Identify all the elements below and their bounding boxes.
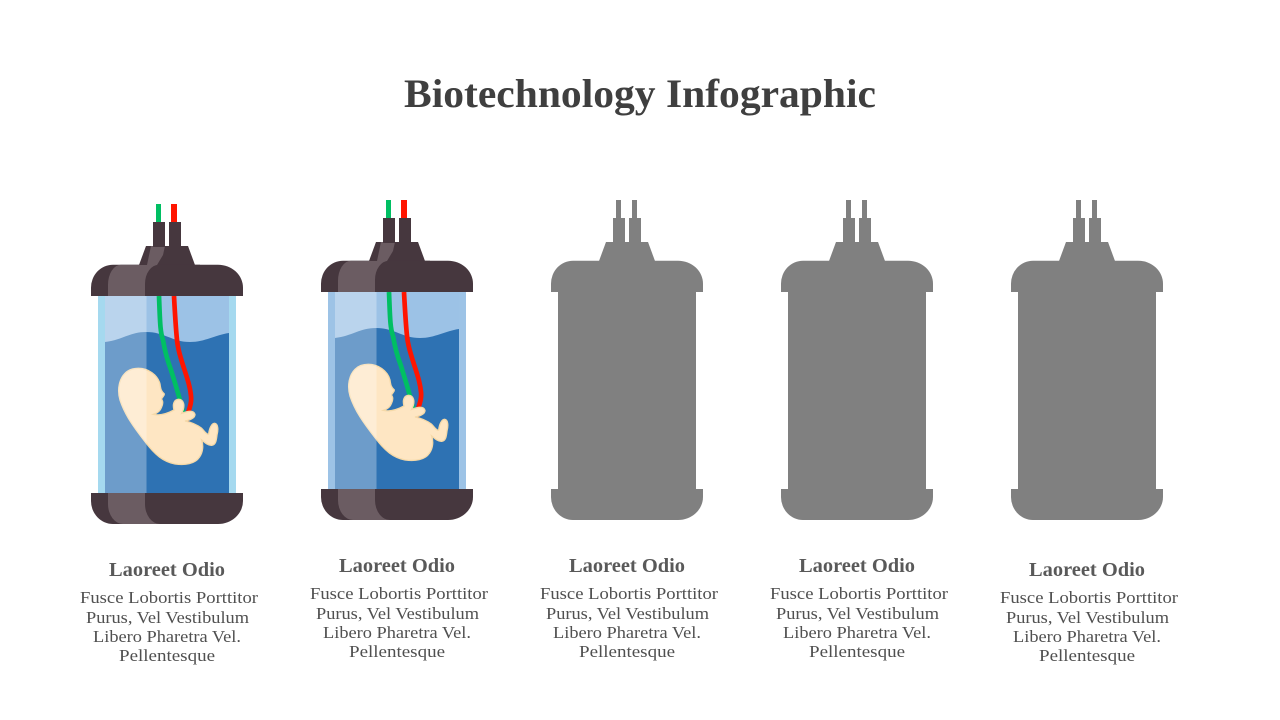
title: Biotechnology Infographic <box>404 71 876 116</box>
text block: column 4: Pellentesque <box>809 642 905 661</box>
text block: column 1: Fusce Lobortis Porttitor <box>80 588 258 607</box>
text block: column 2: Libero Pharetra Vel. <box>323 623 471 642</box>
text block: column 4: Libero Pharetra Vel. <box>783 623 931 642</box>
text block: column 4: Fusce Lobortis Porttitor <box>770 584 948 603</box>
panel: column 1 <box>80 204 258 665</box>
icon: gray bottle silhouette 3 <box>551 200 703 520</box>
panel: column 2 <box>310 200 488 661</box>
text block: column 5 <box>1000 588 1178 665</box>
icon: gray bottle silhouette 5 <box>1011 200 1163 520</box>
text block: column 3: Libero Pharetra Vel. <box>553 623 701 642</box>
text block: column 1: Purus, Vel Vestibulum <box>86 608 249 627</box>
text block: column 5: Purus, Vel Vestibulum <box>1006 608 1169 627</box>
text block: column 5: Libero Pharetra Vel. <box>1013 627 1161 646</box>
heading: column 1: Laoreet Odio <box>109 559 225 581</box>
text block: column 5: Fusce Lobortis Porttitor <box>1000 588 1178 607</box>
panel: column 4 <box>770 200 948 661</box>
panel: column 5 <box>1000 200 1178 665</box>
text block: column 1: Libero Pharetra Vel. <box>93 627 241 646</box>
heading: column 4: Laoreet Odio <box>799 555 915 577</box>
heading: column 5: Laoreet Odio <box>1029 559 1145 581</box>
text block: column 1: Pellentesque <box>119 646 215 665</box>
text block: column 4 <box>770 584 948 661</box>
text block: column 3: Fusce Lobortis Porttitor <box>540 584 718 603</box>
text block: column 2 <box>310 584 488 661</box>
icon: coloured embryo bottle 2 <box>321 200 473 520</box>
text block: column 3: Purus, Vel Vestibulum <box>546 604 709 623</box>
icon: coloured embryo bottle 1 <box>91 204 243 524</box>
text block: column 2: Pellentesque <box>349 642 445 661</box>
text block: column 2: Purus, Vel Vestibulum <box>316 604 479 623</box>
text block: column 5: Pellentesque <box>1039 646 1135 665</box>
text block: column 3: Pellentesque <box>579 642 675 661</box>
icon: gray bottle silhouette 4 <box>781 200 933 520</box>
text block: column 2: Fusce Lobortis Porttitor <box>310 584 488 603</box>
text block: column 1 <box>80 588 258 665</box>
heading: column 3: Laoreet Odio <box>569 555 685 577</box>
text block: column 3 <box>540 584 718 661</box>
text block: column 4: Purus, Vel Vestibulum <box>776 604 939 623</box>
heading: column 2: Laoreet Odio <box>339 555 455 577</box>
panel: column 3 <box>540 200 718 661</box>
